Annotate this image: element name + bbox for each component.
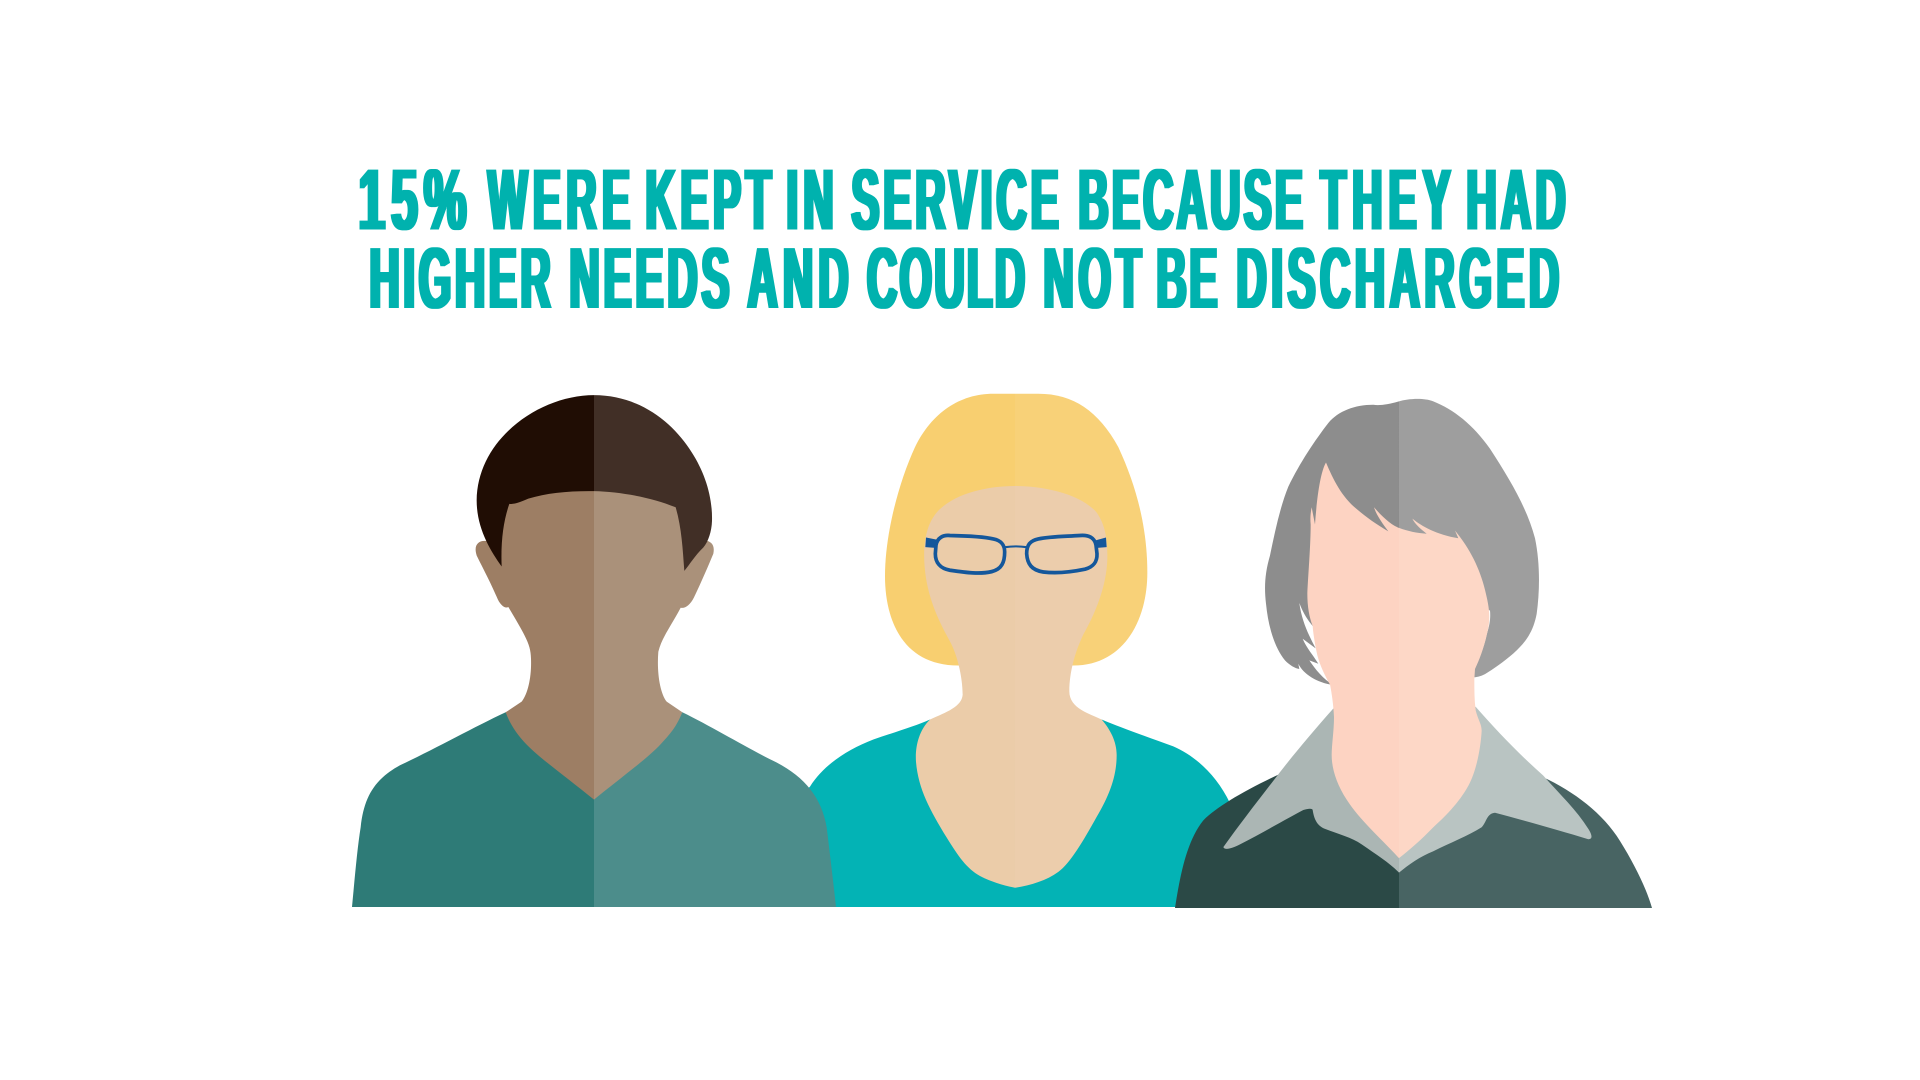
title bbox=[358, 152, 1570, 327]
face, neck and chest bbox=[916, 486, 1117, 888]
title line 2: AND bbox=[748, 230, 854, 327]
blonde hair bbox=[885, 394, 1147, 666]
title line 1: HAD bbox=[1466, 152, 1570, 249]
title line 1: IN bbox=[786, 152, 839, 249]
dark hair bbox=[477, 395, 712, 571]
title line 1: 15% bbox=[358, 152, 472, 249]
title line 1: SERVICE bbox=[852, 152, 1063, 249]
dark green jacket bbox=[1175, 774, 1652, 908]
figure: man with dark hair bbox=[352, 395, 836, 907]
title line 1: BECAUSE bbox=[1078, 152, 1306, 249]
title line 1: KEPT bbox=[646, 152, 776, 249]
face and neck bbox=[1307, 463, 1489, 858]
shirt collar bbox=[1223, 707, 1591, 873]
title line 2: DISCHARGED bbox=[1236, 230, 1564, 327]
title line 2 bbox=[370, 230, 1564, 327]
title line 2: NOT bbox=[1044, 230, 1146, 327]
title line 1: WERE bbox=[488, 152, 636, 249]
teal top bbox=[800, 720, 1238, 907]
green top bbox=[352, 712, 836, 907]
title line 1: THEY bbox=[1320, 152, 1457, 249]
title line 1 bbox=[358, 152, 1570, 249]
glasses bbox=[925, 535, 1107, 573]
figure: woman with blonde hair and glasses bbox=[800, 394, 1238, 907]
skin: face, ears and neck bbox=[476, 466, 714, 800]
figure: woman with grey hair bbox=[1175, 399, 1652, 908]
title line 2: COULD bbox=[867, 230, 1027, 327]
title line 2: NEEDS bbox=[570, 230, 733, 327]
grey hair bbox=[1265, 399, 1539, 685]
title line 2: HIGHER bbox=[370, 230, 554, 327]
title line 2: BE bbox=[1156, 230, 1220, 327]
